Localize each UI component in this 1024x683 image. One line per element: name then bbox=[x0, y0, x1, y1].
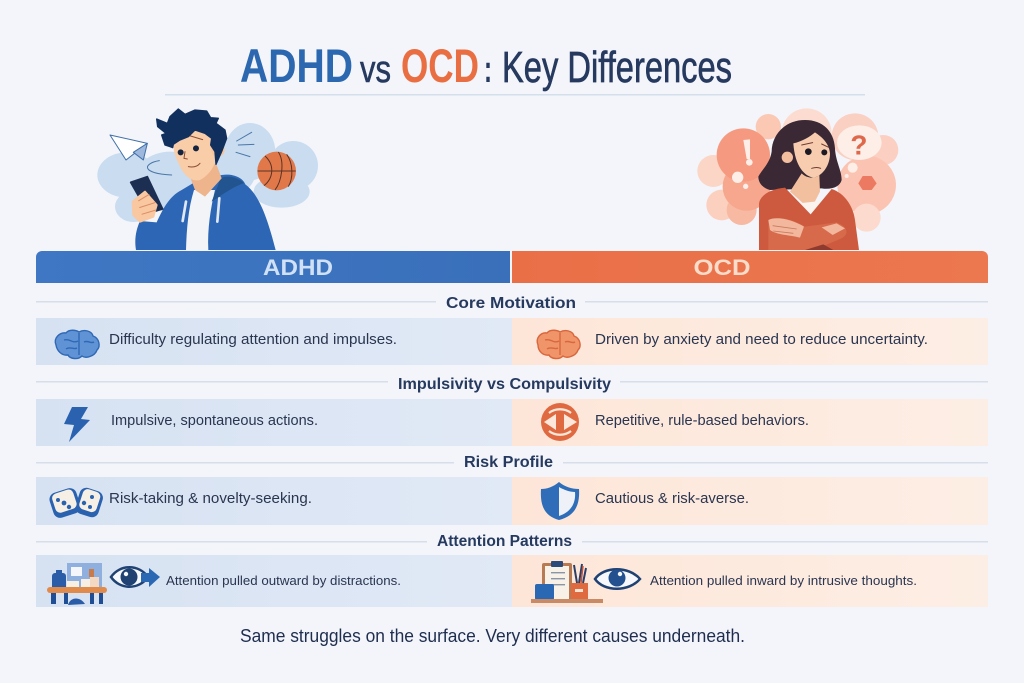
heading: Risk Profile: Risk Profile bbox=[464, 454, 553, 471]
neck bbox=[790, 173, 820, 210]
text: Cautious & risk-averse. bbox=[595, 490, 749, 507]
hair bbox=[157, 109, 227, 164]
text: Attention pulled inward by intrusive thoughts. bbox=[650, 573, 917, 588]
icon: shield bbox=[541, 482, 579, 520]
hand bbox=[133, 192, 157, 222]
basketball bbox=[257, 152, 296, 190]
icon: cluttered desk bbox=[47, 563, 107, 605]
title: OCD bbox=[401, 39, 479, 92]
collar bbox=[798, 201, 821, 213]
panel: attention OCD bbox=[512, 555, 988, 607]
icon: repeat circle bbox=[541, 403, 579, 441]
panel: attention ADHD bbox=[36, 555, 512, 607]
icon: orange brain bbox=[537, 330, 580, 359]
heading: Core Motivation: Core Motivation bbox=[446, 295, 576, 312]
hair bbox=[758, 120, 842, 190]
icon: lightning bolt bbox=[64, 407, 90, 442]
face bbox=[173, 131, 217, 180]
icon: clipboard and pens bbox=[531, 561, 603, 603]
panel: core motivation OCD bbox=[512, 318, 988, 365]
footer tagline: Same struggles on the surface. Very different causes underneath. bbox=[240, 626, 745, 646]
icon: dice bbox=[48, 486, 105, 520]
column header: ADHD: ADHD bbox=[263, 255, 333, 280]
crossed arms bbox=[768, 218, 847, 250]
icon: eye with arrow bbox=[111, 567, 160, 587]
panel: risk ADHD bbox=[36, 477, 512, 525]
icon: blue brain bbox=[55, 330, 99, 359]
paper plane bbox=[110, 135, 147, 160]
text: Impulsive, spontaneous actions. bbox=[111, 412, 318, 429]
panel: core motivation ADHD bbox=[36, 318, 512, 365]
phone bbox=[131, 177, 163, 213]
white thought bubble bbox=[837, 125, 882, 160]
question mark: ? bbox=[850, 129, 868, 160]
column header: OCD: OCD bbox=[694, 255, 750, 280]
text: Risk-taking & novelty-seeking. bbox=[109, 490, 312, 507]
illustration: OCD girl with worries bbox=[697, 108, 898, 250]
column header: OCD bbox=[512, 251, 988, 283]
illustration: ADHD boy with distractions bbox=[97, 109, 318, 250]
title: : bbox=[484, 49, 492, 91]
hexagon worry bbox=[858, 176, 877, 190]
hoodie bbox=[135, 175, 276, 250]
text: Repetitive, rule-based behaviors. bbox=[595, 412, 809, 429]
panel: compulsivity OCD bbox=[512, 399, 988, 446]
sweater bbox=[759, 188, 859, 250]
text: Difficulty regulating attention and impulses. bbox=[109, 331, 397, 348]
panel: risk OCD bbox=[512, 477, 988, 525]
title bbox=[240, 39, 732, 92]
title: ADHD bbox=[240, 39, 353, 92]
exclamation mark bbox=[732, 139, 753, 189]
motion lines bbox=[147, 132, 254, 175]
icon: eye bbox=[595, 569, 640, 589]
title: vs bbox=[360, 49, 391, 91]
column header: ADHD bbox=[36, 251, 510, 283]
shirt bbox=[186, 190, 215, 250]
neck bbox=[190, 163, 222, 197]
hood folds and strings bbox=[212, 177, 244, 202]
text: Driven by anxiety and need to reduce uncertainty. bbox=[595, 331, 928, 348]
text: Attention pulled outward by distractions. bbox=[166, 573, 401, 588]
face bbox=[793, 132, 830, 178]
heading: Impulsivity vs Compulsivity: Impulsivity vs Compulsivity bbox=[398, 376, 611, 393]
title: Key Differences bbox=[502, 43, 732, 92]
panel: impulsivity ADHD bbox=[36, 399, 512, 446]
worry clouds bbox=[697, 108, 898, 232]
heading: Attention Patterns: Attention Patterns bbox=[437, 533, 572, 550]
cloud backdrop bbox=[97, 123, 318, 222]
